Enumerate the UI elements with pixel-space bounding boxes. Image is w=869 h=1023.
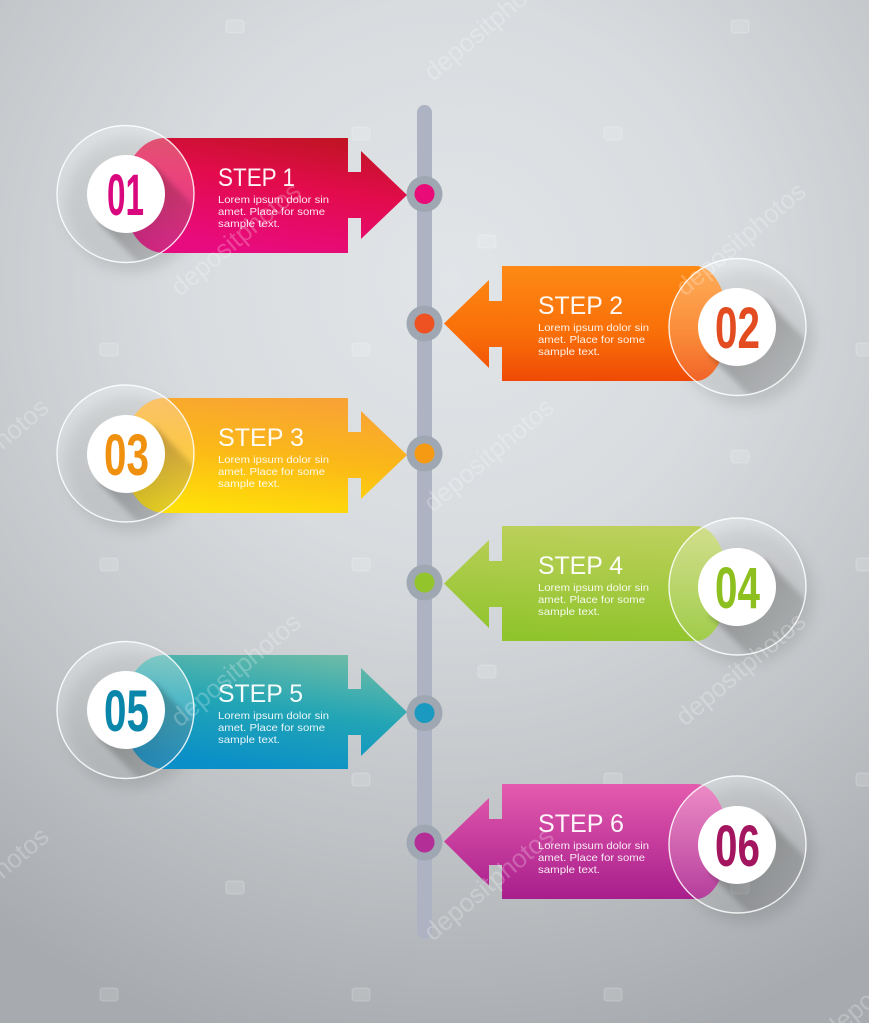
step 4 text: sample text.: [538, 606, 600, 618]
number badge 03: 03: [104, 423, 149, 488]
step 6 text: sample text.: [538, 864, 600, 876]
step 3 text: sample text.: [218, 478, 280, 490]
number badge 04: 04: [715, 556, 760, 621]
step 6 text: [538, 810, 649, 876]
node 2: [406, 306, 442, 342]
step 1 text: Lorem ipsum dolor sin: [218, 194, 329, 206]
node 4: [406, 564, 442, 600]
watermarks: depositphotos: [418, 821, 559, 947]
number badge 06: 06: [715, 814, 760, 879]
glass ring 1: [57, 126, 194, 262]
number badge 01: [87, 155, 165, 233]
step 2 text: STEP 2: [538, 292, 623, 320]
step 3 text: amet. Place for some: [218, 466, 325, 478]
step 3 text: STEP 3: [218, 424, 304, 452]
timeline: vertical line with nodes: [406, 105, 442, 939]
node 6: [406, 824, 442, 860]
arrow banner 3: [123, 398, 407, 513]
number badge 05: [87, 671, 165, 749]
step 2 text: Lorem ipsum dolor sin: [538, 322, 649, 334]
step 2 text: amet. Place for some: [538, 334, 645, 346]
step 5 text: STEP 5: [218, 680, 303, 708]
watermarks: depositphotos: [165, 176, 306, 302]
number badge 05: 05: [104, 679, 149, 744]
node 5: [406, 695, 442, 731]
step 6 text: Lorem ipsum dolor sin: [538, 840, 649, 852]
step 2 text: sample text.: [538, 346, 600, 358]
number badge 02: 02: [715, 296, 760, 361]
arrow banner 4: [444, 526, 728, 641]
step 6 text: STEP 6: [538, 810, 624, 838]
step 5 panel: [56, 640, 407, 790]
step 6 panel: [444, 775, 814, 924]
number badge 02: [698, 288, 776, 366]
glass ring 4: [669, 518, 806, 655]
number badge 03: [87, 415, 165, 493]
node 3: [406, 436, 442, 472]
glass ring 2: [669, 258, 806, 396]
step 4 text: Lorem ipsum dolor sin: [538, 582, 649, 594]
arrow banner 2: [444, 266, 728, 381]
step 4 text: [538, 552, 649, 618]
glass ring 5: [57, 642, 194, 778]
step 1 text: STEP 1: [218, 164, 295, 192]
node 1: [406, 176, 442, 212]
watermarks: depositphotos: [670, 176, 811, 302]
step 1 panel: [56, 124, 407, 274]
glass ring 6: [669, 776, 806, 913]
step 5 text: amet. Place for some: [218, 722, 325, 734]
step 6 text: amet. Place for some: [538, 852, 645, 864]
step 3 text: Lorem ipsum dolor sin: [218, 454, 329, 466]
glass ring 3: [57, 385, 194, 522]
step 5 text: [218, 680, 329, 746]
step 3 panel: [56, 384, 407, 533]
step 1 text: [218, 164, 329, 230]
step 4 panel: [444, 517, 815, 666]
step 3 text: [218, 424, 329, 490]
arrow banner 1: [123, 138, 407, 253]
arrow banner 6: [444, 784, 728, 899]
number badge 01: 01: [107, 163, 144, 228]
step 2 panel: [444, 258, 815, 408]
step 4 text: amet. Place for some: [538, 594, 645, 606]
arrow banner 5: [123, 655, 407, 769]
watermarks: depositphotos: [670, 606, 811, 732]
step 4 text: STEP 4: [538, 552, 623, 580]
step 2 text: [538, 292, 649, 358]
step 1 text: sample text.: [218, 218, 280, 230]
watermarks: depositphotos: [165, 607, 306, 733]
number badge 06: [698, 806, 776, 884]
step 5 text: sample text.: [218, 734, 280, 746]
watermarks: depositphotos: [418, 392, 559, 518]
step 5 text: Lorem ipsum dolor sin: [218, 710, 329, 722]
step 1 text: amet. Place for some: [218, 206, 325, 218]
number badge 04: [698, 548, 776, 626]
